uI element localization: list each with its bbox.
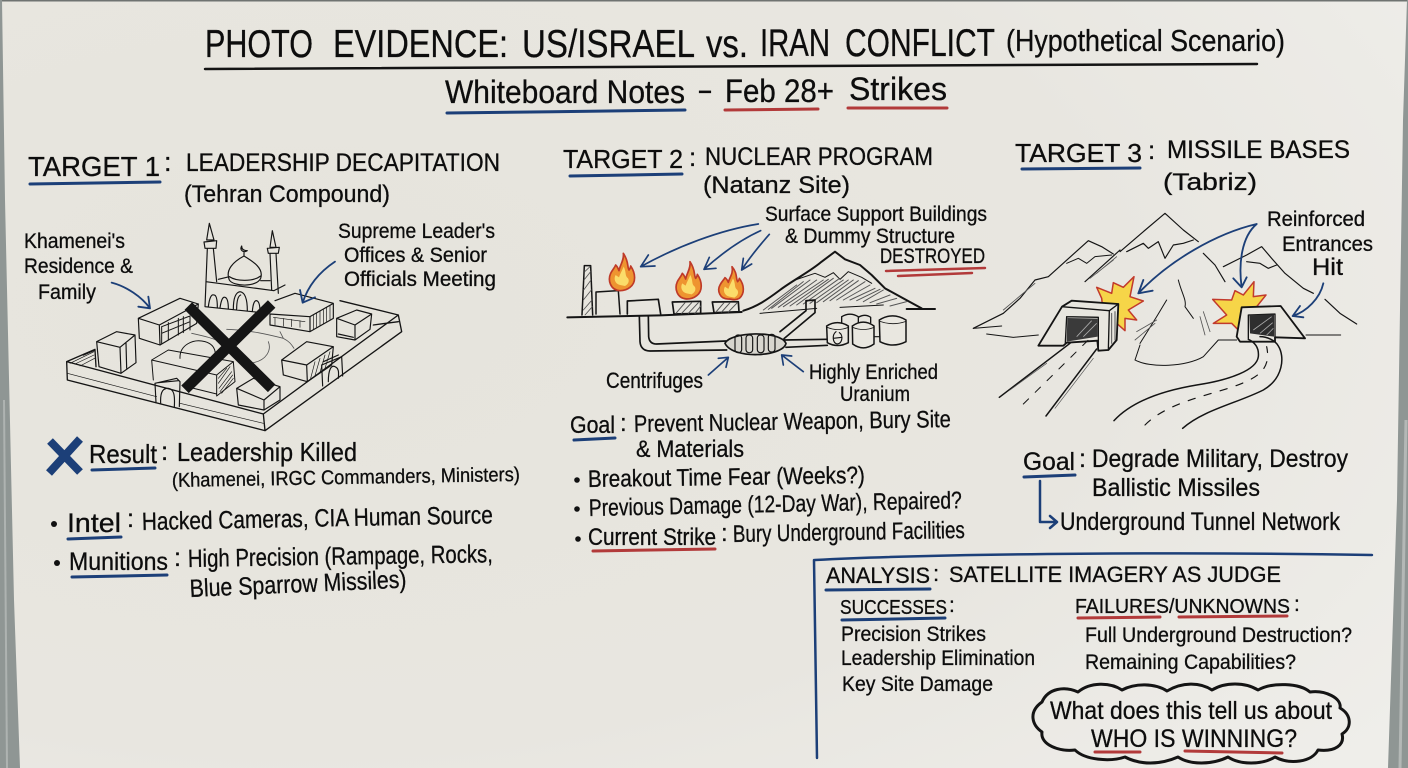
- bullet: previous damage: Previous Damage (12-Day War), Repaired?: [589, 487, 962, 522]
- title: vs.: [706, 23, 748, 66]
- residence building: [138, 298, 198, 345]
- heading: target 2: (Natanz Site): [703, 172, 850, 199]
- title: EVIDENCE:: [333, 23, 508, 66]
- bullet: intel: [51, 501, 493, 539]
- label: surface support buildings destroyed: [765, 203, 987, 276]
- bullet: munitions: :: [174, 544, 181, 572]
- right gate: [322, 355, 343, 386]
- outer wall: [67, 301, 402, 431]
- explosion left: [1097, 277, 1143, 331]
- illustration: natanz site: [567, 224, 935, 375]
- successes list: Precision Strikes: [841, 623, 986, 646]
- storage tanks: [827, 314, 906, 348]
- successes list: [840, 594, 1035, 696]
- icon: blue X: [49, 439, 80, 473]
- bullet: munitions: High Precision (Rampage, Rocks,: [188, 540, 493, 573]
- subtitle: –: [699, 71, 711, 107]
- bullet: current strike: :: [721, 520, 728, 547]
- failures and unknowns list: [1075, 593, 1352, 674]
- mountain: [743, 252, 922, 313]
- bullet: intel: Intel: [67, 508, 121, 538]
- underground chamber with centrifuges: [725, 334, 786, 355]
- label: Khamenei's residence: Residence &: [24, 255, 133, 278]
- front building: [237, 378, 280, 410]
- heading: target 1: :: [164, 147, 172, 177]
- label: highly enriched uranium: Highly Enriched: [809, 361, 938, 384]
- flame 1: [609, 253, 635, 291]
- result: [49, 436, 520, 492]
- label: Khamenei's residence: Family: [38, 281, 96, 304]
- goal: nuclear: Goal: [570, 412, 615, 439]
- heading: target 3: (Tabriz): [1163, 169, 1257, 196]
- front gate: [155, 378, 180, 407]
- panel: target 3 missile bases: [973, 135, 1373, 536]
- arrow: goal to tunnel network: [1040, 481, 1057, 528]
- label: surface support buildings destroyed: & Dummy Structure: [785, 225, 955, 248]
- bunker left: [1038, 301, 1118, 351]
- ground line: [567, 309, 935, 317]
- bunker right: [1237, 306, 1305, 342]
- road left: [999, 343, 1097, 416]
- heading: target 1: [28, 147, 500, 208]
- arrow: uranium: [782, 355, 803, 372]
- arrow: to offices: [300, 262, 335, 303]
- subtitle: Strikes: [849, 71, 947, 107]
- bullet: munitions: Munitions: [69, 548, 168, 576]
- result: Leadership Killed: [177, 437, 357, 467]
- arrow: to residence: [112, 283, 150, 308]
- heading: target 3: [1015, 135, 1350, 196]
- goal: nuclear: :: [620, 410, 627, 437]
- destroyed buildings: [672, 301, 739, 314]
- subtitle: Feb 28+: [725, 73, 834, 109]
- bullet: munitions: Blue Sparrow Missiles): [189, 566, 407, 603]
- bullet: current strike: Bury Underground Facilities: [733, 517, 965, 548]
- title: IRAN: [760, 22, 830, 65]
- heading: analysis: [826, 561, 1281, 590]
- bullet: munitions: [54, 540, 493, 603]
- failures and unknowns list: FAILURES/UNKNOWNS: [1075, 596, 1290, 618]
- subtitle: Whiteboard Notes: [445, 74, 685, 110]
- label: highly enriched uranium: Uranium: [840, 383, 910, 406]
- heading: target 3: MISSILE BASES: [1167, 136, 1350, 164]
- goal: missile: :: [1079, 445, 1086, 473]
- label: surface support buildings destroyed: Surface Support Buildings: [765, 203, 987, 226]
- title: [205, 22, 1285, 69]
- arrow: centrifuges: [708, 357, 728, 375]
- label: Supreme Leader's offices: Supreme Leader's: [338, 220, 495, 243]
- result: :: [161, 436, 168, 466]
- goal: nuclear: & Materials: [636, 436, 744, 463]
- goal: nuclear: Prevent Nuclear Weapon, Bury Site: [634, 406, 951, 438]
- left cube building: [97, 332, 136, 373]
- title: (Hypothetical Scenario): [1006, 23, 1285, 58]
- failures and unknowns list: :: [1294, 593, 1300, 616]
- bullet: current strike: [575, 517, 965, 551]
- successes list: Leadership Elimination: [841, 647, 1035, 670]
- arrows: reinforced entrances: [1138, 224, 1323, 317]
- title: CONFLICT: [845, 22, 995, 65]
- mosque: [204, 223, 285, 313]
- chimney and buildings: [582, 266, 661, 315]
- label: Khamenei's residence: Khamenei's: [24, 230, 125, 253]
- explosion right: [1213, 282, 1266, 332]
- right cube building: [337, 310, 372, 340]
- heading: target 2: NUCLEAR PROGRAM: [705, 143, 933, 171]
- label: Supreme Leader's offices: Officials Meeting: [344, 268, 496, 291]
- failures and unknowns list: Full Underground Destruction?: [1085, 624, 1352, 647]
- label: Khamenei's residence: [24, 230, 133, 304]
- mountains: [973, 213, 1357, 365]
- bullet: intel: :: [127, 505, 134, 533]
- heading: target 1: LEADERSHIP DECAPITATION: [186, 149, 500, 177]
- goal: missile: Ballistic Missiles: [1092, 474, 1260, 502]
- illustration: tabriz missile bases: [973, 213, 1357, 428]
- label: surface support buildings destroyed: DESTROYED: [880, 245, 985, 268]
- result: (Khamenei, IRGC Commanders, Ministers): [172, 464, 520, 492]
- heading: target 1: (Tehran Compound): [184, 181, 390, 208]
- label: reinforced entrances hit: Reinforced: [1267, 208, 1365, 231]
- panel: target 1 leadership decapitation: [24, 147, 520, 603]
- tunnel: [639, 316, 727, 351]
- flame 3: [719, 267, 743, 300]
- heading: target 1: TARGET 1: [28, 151, 160, 182]
- heading: analysis: ANALYSIS: [826, 563, 930, 588]
- successes list: :: [949, 594, 955, 617]
- road right: [1114, 337, 1282, 428]
- goal: nuclear: [570, 406, 951, 463]
- bullet: intel: Hacked Cameras, CIA Human Source: [142, 501, 493, 536]
- right lower building: [282, 342, 333, 382]
- heading: target 3: :: [1148, 135, 1155, 165]
- callout: who is winning: [1033, 684, 1349, 763]
- heading: analysis: SATELLITE IMAGERY AS JUDGE: [949, 562, 1281, 587]
- successes list: SUCCESSES: [840, 597, 947, 619]
- title: US/ISRAEL: [522, 23, 695, 66]
- panel: target 2 nuclear program: [563, 142, 987, 551]
- goal: missile: Degrade Military, Destroy: [1092, 445, 1348, 473]
- label: reinforced entrances hit: Hit: [1312, 254, 1343, 281]
- bullet: breakout time: Breakout Time Fear (Weeks?): [588, 462, 865, 493]
- black X: [185, 304, 272, 389]
- analysis frame: [814, 553, 1372, 758]
- label: reinforced entrances hit: Entrances: [1282, 233, 1373, 256]
- failures and unknowns list: Remaining Capabilities?: [1085, 651, 1296, 674]
- heading: analysis: :: [933, 561, 939, 586]
- goal: missile: Goal: [1023, 448, 1075, 476]
- illustration: tehran compound: [67, 223, 402, 431]
- callout: who is winning: What does this tell us about: [1050, 697, 1332, 725]
- label: reinforced entrances hit: [1267, 208, 1373, 281]
- flame 2: [676, 262, 701, 299]
- heading: target 2: [563, 142, 933, 199]
- arrows: surface buildings: [641, 224, 769, 270]
- result: Result: [89, 439, 158, 469]
- courtyard dome and central building: [152, 341, 235, 396]
- panel: analysis: [814, 553, 1372, 763]
- subtitle: [445, 71, 947, 113]
- access shaft and pipe: [780, 300, 827, 347]
- courtyard curves: [192, 329, 294, 363]
- callout: who is winning: WHO IS WINNING?: [1091, 725, 1297, 753]
- offices building: [270, 293, 333, 332]
- heading: target 3: TARGET 3: [1015, 138, 1142, 168]
- bullet: current strike: Current Strike: [588, 524, 716, 551]
- title: PHOTO: [205, 23, 313, 66]
- goal: missile: [1023, 445, 1348, 502]
- heading: target 2: :: [689, 142, 696, 172]
- heading: target 2: TARGET 2: [563, 144, 683, 174]
- label: Supreme Leader's offices: Offices & Senior: [344, 244, 487, 267]
- label: Supreme Leader's offices: [338, 220, 496, 291]
- label: centrifuges: Centrifuges: [606, 368, 703, 393]
- label: highly enriched uranium: [809, 361, 938, 406]
- text: underground tunnel network: Underground Tunnel Network: [1060, 508, 1340, 536]
- successes list: Key Site Damage: [842, 673, 993, 696]
